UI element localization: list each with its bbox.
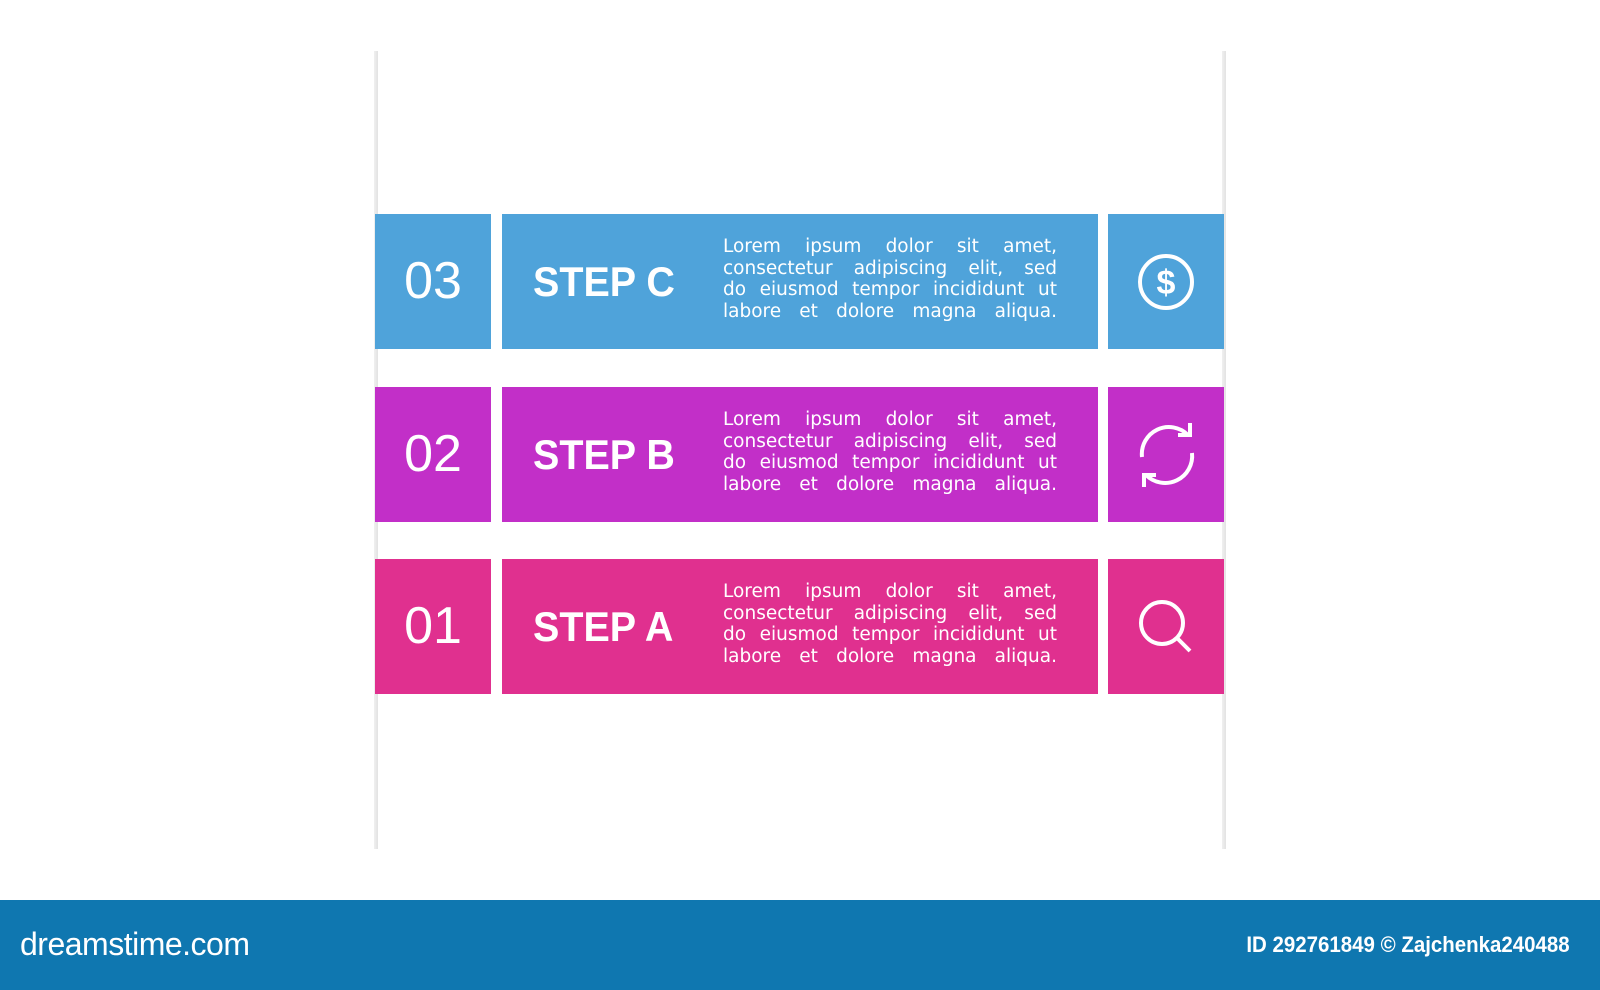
panel: step C: consectetur adipiscing elit, sed: [723, 258, 1057, 278]
panel: step B: STEP B: [533, 431, 675, 478]
panel: step B: [502, 387, 1098, 522]
panel: step A: STEP A: [533, 603, 673, 650]
panel: step A: consectetur adipiscing elit, sed: [723, 602, 1057, 624]
panel: step C: labore et dolore magna aliqua.: [723, 300, 1057, 322]
panel: step C: [502, 214, 1098, 349]
panel: step B: Lorem ipsum dolor sit amet,: [723, 409, 1057, 430]
panel: step A: labore et dolore magna aliqua.: [723, 646, 1057, 666]
number 02: 02: [404, 425, 462, 483]
row: step B: [375, 387, 1224, 522]
panel: step B: labore et dolore magna aliqua.: [723, 474, 1057, 494]
number 02: [375, 387, 491, 522]
panel: step A: Lorem ipsum dolor sit amet,: [723, 581, 1057, 602]
panel: step B: do eiusmod tempor incididunt ut: [723, 452, 1057, 473]
number 03: 03: [404, 252, 462, 310]
panel: step B: consectetur adipiscing elit, sed: [723, 430, 1057, 452]
panel: step A: [502, 559, 1098, 694]
panel: step A: do eiusmod tempor incididunt ut: [723, 624, 1057, 645]
panel: step C: do eiusmod tempor incididunt ut: [723, 279, 1057, 300]
panel: step C: STEP C: [533, 258, 675, 305]
footer id: ID 292761849 © Zajchenka240488: [1247, 932, 1570, 957]
row: step C: [375, 214, 1224, 349]
icon: dollar: [1108, 214, 1224, 349]
number 01: [375, 559, 491, 694]
icon: dollar: $: [1157, 264, 1176, 302]
panel: step C: Lorem ipsum dolor sit amet,: [723, 236, 1057, 257]
icon: refresh: [1108, 387, 1224, 522]
icon: search: [1108, 559, 1224, 694]
row: step A: [375, 559, 1224, 694]
number 03: [375, 214, 491, 349]
number 01: 01: [404, 597, 462, 655]
footer bar: [0, 900, 1600, 990]
footer logo: dreamstime.com: [20, 926, 250, 962]
